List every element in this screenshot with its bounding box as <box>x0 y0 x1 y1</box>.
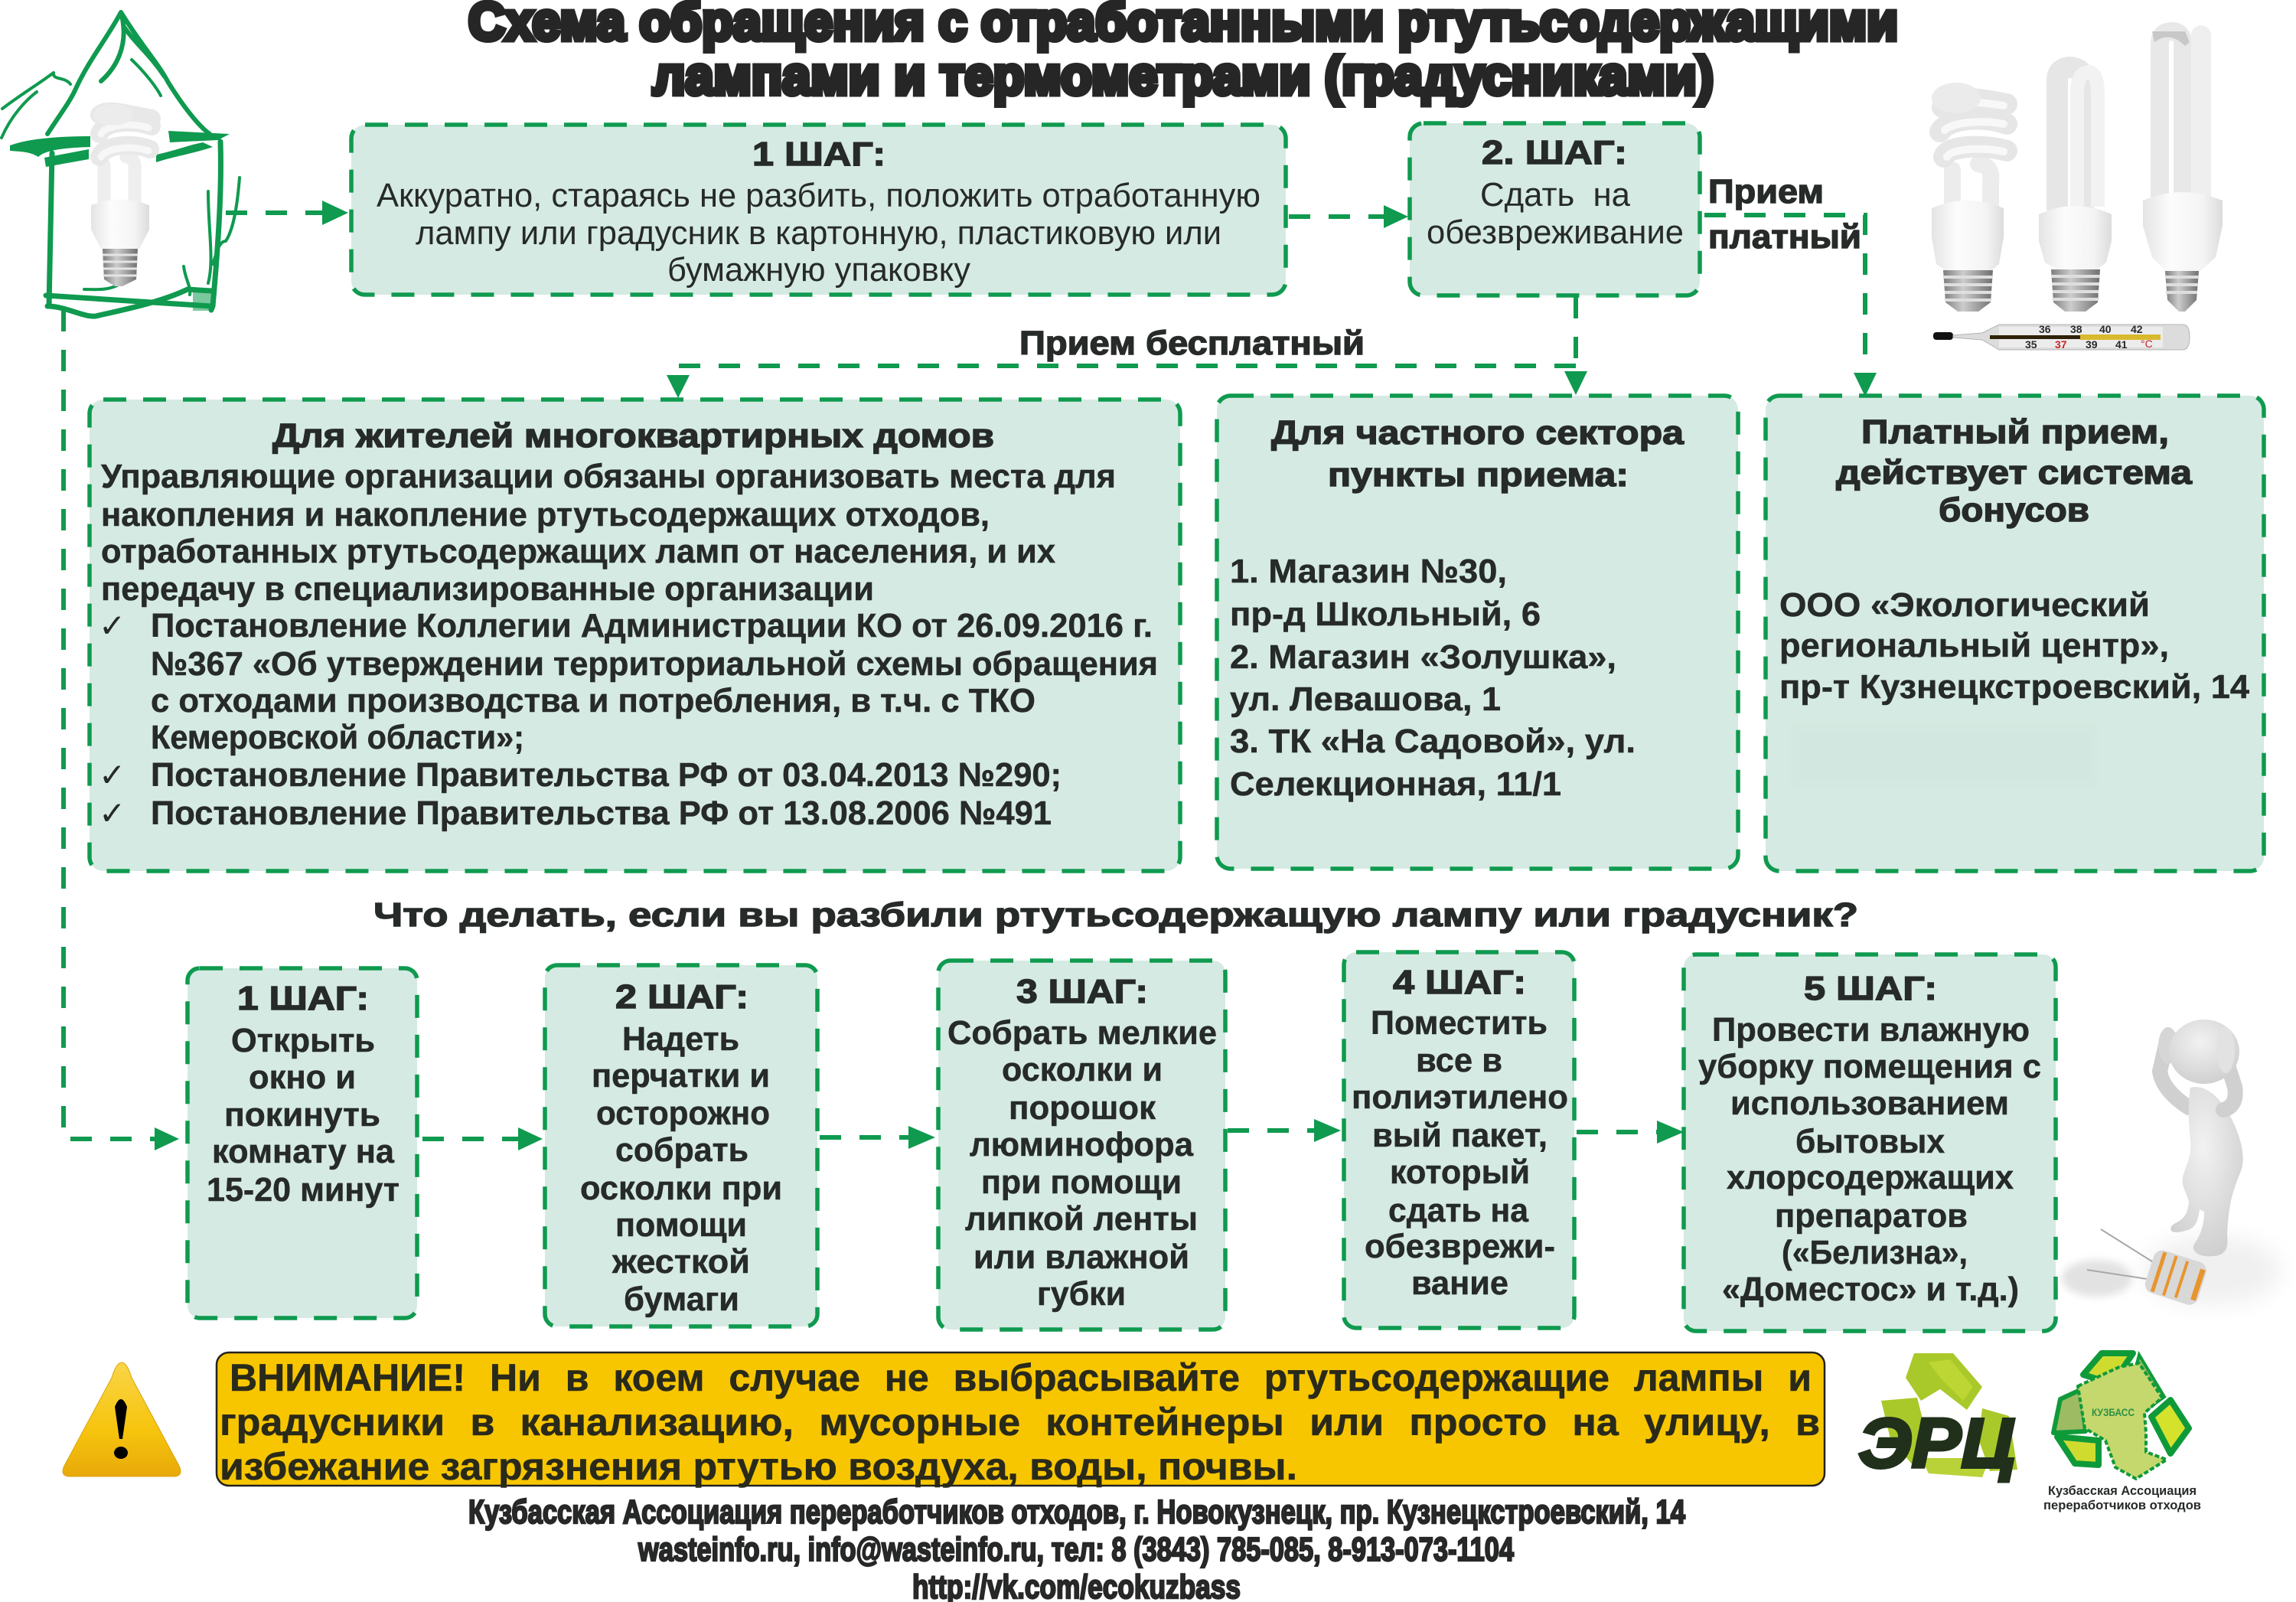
panel: broken step 2 <box>545 965 817 1326</box>
arrow: broken step 1 to 2 <box>422 1127 543 1150</box>
panel: broken step 1 <box>188 968 417 1318</box>
text: broken step 4: Поместить <box>1371 1004 1548 1042</box>
text: broken step 2: помощи <box>615 1206 747 1244</box>
icon: thermometer: 35 <box>2025 338 2037 351</box>
text: association name: переработчиков отходов <box>2043 1498 2201 1512</box>
text: step 2 instructions: обезвреживание <box>1427 214 1684 251</box>
text: broken step 2: бумаги <box>624 1281 739 1318</box>
heading: private sector: Для частного сектора <box>1271 414 1684 452</box>
arrow: broken step 4 to 5 <box>1577 1121 1684 1144</box>
text: broken step 3: Собрать мелкие <box>947 1014 1217 1052</box>
arrow: step 2 to paid point <box>1704 215 1877 396</box>
heading: private sector: пункты приема: <box>1328 456 1629 494</box>
panel: private sector <box>1217 396 1738 869</box>
text: broken step 3: или влажной <box>974 1238 1189 1276</box>
arrow: broken step 3 to 4 <box>1228 1119 1341 1142</box>
text: step 1 instructions: бумажную упаковку <box>667 251 970 289</box>
text: broken step 3: осколки и <box>1002 1051 1163 1088</box>
text: broken step 1: покинуть <box>224 1096 380 1134</box>
list: regulations: №367 «Об утверждении территориальной схемы обращения <box>151 645 1158 683</box>
footer: contacts: wasteinfo.ru, info@wasteinfo.ru, тел: 8 (3843) 785-085, 8-913-073-1104 <box>638 1531 1514 1568</box>
icon: thermometer: 40 <box>2099 323 2112 335</box>
text: broken step 5: «Доместос» и т.д.) <box>1722 1271 2019 1308</box>
list: collection points: Селекционная, 11/1 <box>1230 765 1561 803</box>
panel: apartment residents <box>90 400 1180 871</box>
text: broken step 5: бытовых <box>1795 1123 1945 1160</box>
text: broken step 5: («Белизна», <box>1782 1234 1968 1271</box>
text: broken step 3: люминофора <box>970 1126 1194 1163</box>
icon: thermometer: 42 <box>2131 323 2143 335</box>
icon: warning triangle <box>63 1362 181 1476</box>
text: paid collection address: пр-т Кузнецкстроевский, 14 <box>1779 668 2250 706</box>
icon: thermometer: 36 <box>2039 323 2051 335</box>
heading: paid acceptance: бонусов <box>1939 491 2089 529</box>
text: obligations: отработанных ртутьсодержащих ламп от населения, и их <box>101 533 1056 570</box>
icon: thermometer: 41 <box>2115 338 2128 351</box>
logo: ЭРЦ <box>1858 1353 2017 1483</box>
text: broken step 5: препаратов <box>1775 1197 1968 1235</box>
list: collection points: 3. ТК «На Садовой», ул. <box>1230 723 1636 760</box>
panel: paid acceptance <box>1766 396 2264 871</box>
text: broken step 4 <box>1352 1004 1568 1302</box>
text: broken step 2: осколки при <box>580 1170 782 1207</box>
icon: thermometer <box>1933 323 2190 351</box>
list: collection points: 1. Магазин №30, <box>1230 553 1507 590</box>
panel: broken step 4 <box>1344 952 1574 1328</box>
heading: paid acceptance <box>1836 413 2193 529</box>
icon: two-tube lamp <box>2039 67 2112 312</box>
text: broken step 4: вание <box>1411 1264 1508 1302</box>
icon: thermometer: °C <box>2141 338 2153 350</box>
list: regulations: с отходами производства и потребления, в т.ч. с ТКО <box>151 682 1035 719</box>
logo: Kuzbass association <box>2043 1353 2201 1512</box>
text: broken step 2: собрать <box>615 1131 748 1169</box>
heading: broken step 3: 3 ШАГ: <box>1016 973 1148 1010</box>
logo: ЭРЦ: ЭРЦ <box>1858 1405 2015 1483</box>
text: obligations: передачу в специализированные организации <box>101 570 874 608</box>
panel: step 2 disposal <box>1410 123 1700 295</box>
icon: tall two-tube lamp <box>2143 31 2223 312</box>
text: broken step 1: Открыть <box>231 1022 375 1059</box>
icon: thermometer: 38 <box>2070 323 2082 335</box>
text: broken step 3 <box>947 1014 1217 1313</box>
text: broken step 4: обезврежи- <box>1365 1228 1555 1265</box>
callout: warning banner: ВНИМАНИЕ! Ни в коем случае не выбрасывайте ртутьсодержащие лампы и <box>230 1356 1812 1399</box>
text: broken step 3: липкой ленты <box>965 1200 1198 1238</box>
arrow: free acceptance to apartment block <box>667 366 1576 398</box>
arrow: step 1 to step 2 <box>1289 205 1408 228</box>
text: broken step 5: использованием <box>1730 1085 2009 1122</box>
label: paid acceptance: платный <box>1708 218 1861 256</box>
list: regulations: ✓ <box>99 794 126 832</box>
text: broken step 3: порошок <box>1009 1089 1156 1127</box>
list: collection points <box>1230 553 1636 803</box>
list: collection points: 2. Магазин «Золушка», <box>1230 638 1616 676</box>
label: free acceptance: Прием бесплатный <box>1019 325 1365 362</box>
heading: broken step 4: 4 ШАГ: <box>1393 964 1526 1001</box>
icon: broken lamp base <box>2087 1229 2209 1307</box>
list: regulations: ✓ <box>99 756 126 794</box>
callout: warning banner <box>217 1352 1825 1488</box>
text: broken step 4: который <box>1390 1153 1530 1191</box>
heading: broken step 2: 2 ШАГ: <box>615 978 748 1016</box>
arrow: house to step 1 <box>226 201 348 225</box>
heading: broken step 5: 5 ШАГ: <box>1804 970 1937 1007</box>
text: obligations <box>101 458 1116 608</box>
callout: warning banner: избежание загрязнения ртутью воздуха, воды, почвы. <box>220 1445 1297 1488</box>
text: broken step 4: полиэтилено <box>1352 1078 1568 1116</box>
heading: apartment residents: Для жителей многоквартирных домов <box>272 417 994 455</box>
text: obligations: накопления и накопление ртутьсодержащих отходов, <box>101 496 990 533</box>
text: paid collection address: региональный центр», <box>1779 627 2169 664</box>
heading: step 1: 1 ШАГ: <box>752 135 885 173</box>
text: step 1 instructions <box>377 177 1261 289</box>
text: obligations: Управляющие организации обязаны организовать места для <box>101 458 1116 495</box>
callout: warning banner: градусники в канализацию, мусорные контейнеры или просто на улицу, в <box>220 1401 1820 1444</box>
text: broken step 5: уборку помещения с <box>1698 1048 2041 1085</box>
text: paid collection address: ООО «Экологический <box>1779 586 2150 624</box>
text: broken step 2: жесткой <box>612 1243 750 1281</box>
text: step 1 instructions: Аккуратно, стараясь не разбить, положить отработанную <box>377 177 1261 214</box>
text: broken step 1 <box>207 1022 400 1209</box>
heading: paid acceptance: Платный прием, <box>1861 413 2169 451</box>
label: paid acceptance: Прием <box>1708 173 1824 210</box>
list: regulations: Постановление Правительства РФ от 03.04.2013 №290; <box>151 756 1062 794</box>
panel: step 1 disposal <box>351 125 1286 295</box>
label: paid acceptance <box>1708 173 1861 256</box>
list: regulations: Постановление Коллегии Администрации КО от 26.09.2016 г. <box>151 607 1153 644</box>
text: broken step 3: губки <box>1037 1275 1126 1313</box>
panel: broken step 5 <box>1684 954 2056 1331</box>
text: broken step 1: окно и <box>249 1059 356 1096</box>
panel: broken step 3 <box>938 961 1225 1330</box>
text: broken step 2 <box>580 1020 782 1318</box>
text: broken step 5: хлорсодержащих <box>1727 1159 2014 1196</box>
icon: thermometer: 37 <box>2055 338 2067 351</box>
footer: contacts: Кузбасская Ассоциация переработчиков отходов, г. Новокузнецк, пр. Кузнецкстроевский, 14 <box>468 1493 1685 1531</box>
icon: compact spiral lamp <box>91 104 152 286</box>
heading: broken step 1: 1 ШАГ: <box>237 980 369 1017</box>
text: broken step 4: сдать на <box>1388 1192 1529 1229</box>
icon: spiral lamp <box>1932 83 2007 312</box>
text: broken step 1: 15-20 минут <box>207 1171 400 1209</box>
heading: step 2: 2. ШАГ: <box>1482 134 1627 171</box>
icon: figure <box>2158 1020 2243 1256</box>
text: step 2 instructions: Сдать на <box>1480 176 1631 214</box>
text: paid collection address <box>1779 586 2250 706</box>
text: broken step 5 <box>1698 1011 2041 1308</box>
icon: worried figure with broken lamp <box>2062 1020 2281 1307</box>
text: broken step 3: при помощи <box>981 1163 1182 1201</box>
arrow: broken step 2 to 3 <box>820 1126 935 1149</box>
text: broken step 4: все в <box>1416 1042 1502 1079</box>
text: step 2 instructions <box>1427 176 1684 251</box>
text: step 1 instructions: лампу или градусник в картонную, пластиковую или <box>416 214 1221 252</box>
list: regulations: ✓ <box>99 607 126 644</box>
arrow: house down to broken lamp steps <box>64 310 179 1150</box>
icon: green house with lamp <box>2 12 240 316</box>
list: collection points: ул. Левашова, 1 <box>1230 680 1501 718</box>
text: broken step 2: осторожно <box>596 1095 770 1132</box>
text: broken step 4: вый пакет, <box>1372 1117 1548 1154</box>
list: regulations <box>99 607 1158 832</box>
text: broken step 2: перчатки и <box>592 1057 770 1095</box>
heading: private sector <box>1271 414 1684 494</box>
footer: contacts <box>468 1493 1685 1602</box>
heading: what to do if broken: Что делать, если вы разбили ртутьсодержащую лампу или градусник? <box>373 896 1858 934</box>
list: regulations: Постановление Правительства РФ от 13.08.2006 №491 <box>151 794 1052 832</box>
title <box>468 0 1898 106</box>
heading: paid acceptance: действует система <box>1836 454 2193 491</box>
list: regulations: Кемеровской области»; <box>151 719 524 756</box>
icon: three lamps <box>1932 31 2223 312</box>
text: broken step 5: Провести влажную <box>1712 1011 2030 1049</box>
text: association name <box>2043 1483 2201 1512</box>
text: broken step 2: Надеть <box>622 1020 739 1058</box>
text: association name: Кузбасская Ассоциация <box>2048 1483 2197 1498</box>
title: лампами и термометрами (градусниками) <box>653 46 1714 106</box>
text: broken step 1: комнату на <box>212 1133 395 1170</box>
icon: thermometer: 39 <box>2086 338 2098 351</box>
arrow: step 2 to private sector <box>1564 297 1587 395</box>
list: collection points: пр-д Школьный, 6 <box>1230 595 1541 633</box>
logo: Kuzbass association: КУЗБАСС <box>2092 1406 2135 1418</box>
